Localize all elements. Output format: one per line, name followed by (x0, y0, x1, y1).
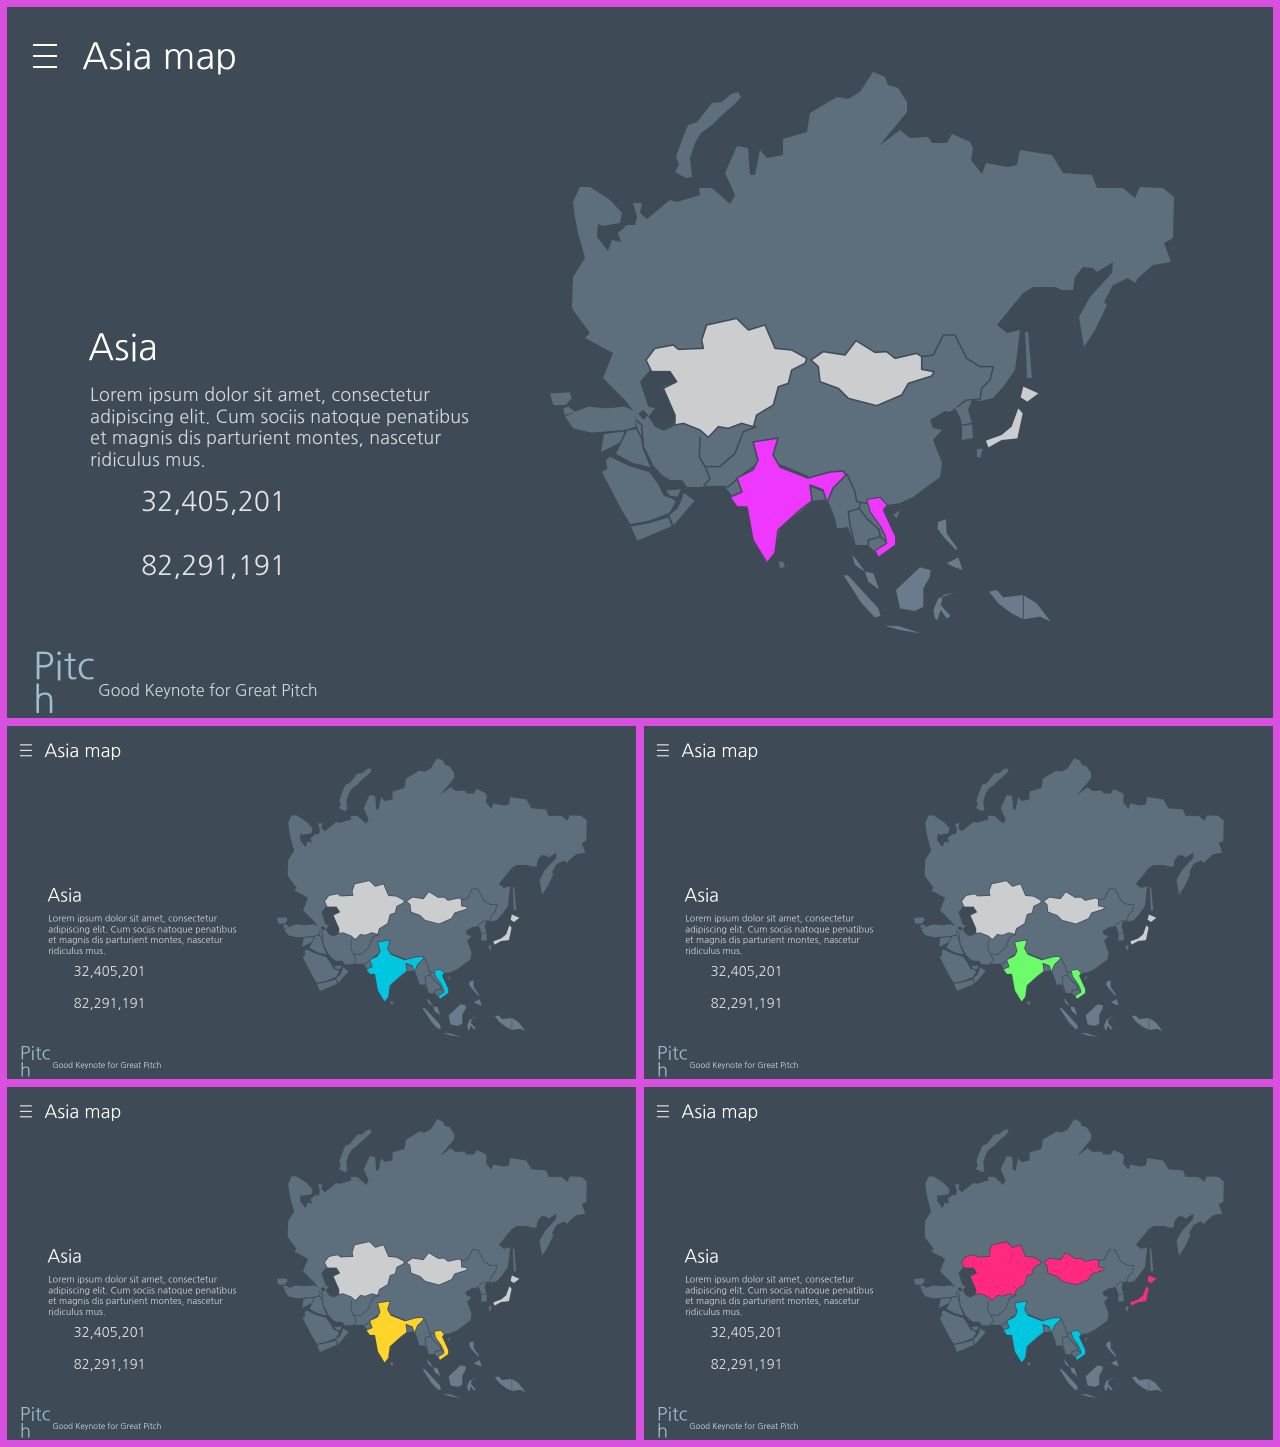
text block: adipiscing elit. Cum sociis natoque penatibus (685, 1286, 873, 1295)
tagline: Good Keynote for Great Pitch (98, 683, 318, 699)
text block: adipiscing elit. Cum sociis natoque penatibus (90, 408, 469, 426)
logo: Pitch (657, 1044, 688, 1079)
text block: et magnis dis parturient montes, nascetur (685, 936, 860, 944)
base land masses (550, 72, 1174, 633)
number two: 82,291,191 (711, 1358, 783, 1371)
text block: adipiscing elit. Cum sociis natoque penatibus (685, 925, 873, 934)
Asia map graphic (550, 72, 1174, 634)
logo: Pitch (20, 1044, 51, 1079)
base land masses (914, 758, 1224, 1037)
text block (48, 1275, 236, 1316)
highlighted Vietnam (434, 969, 448, 999)
tagline: Good Keynote for Great Pitch (52, 1062, 161, 1070)
Japan (493, 1276, 519, 1306)
Asia map graphic (276, 758, 587, 1037)
heading: Asia (684, 1247, 719, 1265)
text block: ridiculus mus. (48, 946, 106, 955)
title: Asia map (44, 1103, 121, 1121)
text block: ridiculus mus. (685, 1307, 743, 1316)
text block: et magnis dis parturient montes, nascetur (685, 1297, 860, 1305)
text block: ridiculus mus. (90, 450, 206, 468)
heading: Asia (47, 886, 82, 904)
title: Asia map (44, 742, 121, 760)
text block: Lorem ipsum dolor sit amet, consectetur (48, 914, 217, 923)
logo: Pitch (33, 648, 95, 718)
title: Asia map (681, 1103, 758, 1121)
Kazakhstan (961, 1242, 1041, 1301)
Mongolia (406, 1253, 468, 1285)
highlighted India (730, 438, 846, 563)
text block: adipiscing elit. Cum sociis natoque penatibus (48, 1286, 236, 1295)
tagline: Good Keynote for Great Pitch (52, 1423, 161, 1431)
text block: ridiculus mus. (685, 946, 743, 955)
text block (48, 914, 236, 955)
panel: mini slide, cyan highlight (7, 726, 636, 1079)
highlighted Vietnam (434, 1330, 448, 1360)
Mongolia (1043, 892, 1105, 924)
highlighted Vietnam (1071, 1330, 1085, 1360)
icon: menu (20, 744, 32, 756)
Asia map graphic (914, 1119, 1224, 1398)
Japan (1130, 1276, 1156, 1306)
Kazakhstan (961, 881, 1041, 940)
number one: 32,405,201 (711, 965, 783, 978)
Japan (1130, 915, 1156, 945)
text block: et magnis dis parturient montes, nascetur (48, 1297, 223, 1305)
highlighted India (1003, 940, 1061, 1002)
panel: mini slide, green highlight (644, 726, 1273, 1079)
text block (685, 914, 874, 955)
icon: menu (20, 1105, 32, 1118)
Mongolia (406, 892, 468, 924)
text block: Lorem ipsum dolor sit amet, consectetur (685, 1275, 854, 1284)
heading: Asia (88, 330, 158, 366)
text block: Lorem ipsum dolor sit amet, consectetur (48, 1275, 217, 1284)
Asia map graphic (276, 1119, 587, 1398)
highlighted India (1003, 1301, 1061, 1363)
text block: Lorem ipsum dolor sit amet, consectetur (685, 914, 854, 923)
icon: menu (33, 44, 57, 68)
text block (685, 1275, 874, 1316)
title: Asia map (82, 39, 237, 75)
heading: Asia (684, 886, 719, 904)
panel: mini slide, yellow highlight (7, 1087, 636, 1440)
Kazakhstan (324, 1242, 404, 1301)
text block: adipiscing elit. Cum sociis natoque penatibus (48, 925, 236, 934)
Kazakhstan (324, 881, 404, 940)
highlighted India (366, 940, 424, 1002)
Asia map graphic (914, 758, 1224, 1037)
highlighted Vietnam (867, 497, 896, 557)
panel: main slide, magenta highlight (7, 7, 1273, 718)
base land masses (277, 758, 587, 1037)
logo: Pitch (657, 1405, 688, 1440)
number two: 82,291,191 (711, 997, 783, 1010)
Mongolia (811, 341, 934, 406)
Mongolia (1043, 1253, 1105, 1285)
icon: menu (656, 1105, 669, 1118)
Japan (986, 387, 1038, 447)
highlighted Vietnam (1071, 969, 1085, 999)
panel: mini slide, pink and cyan highlight (644, 1087, 1273, 1440)
text block: et magnis dis parturient montes, nascetur (90, 429, 441, 447)
base land masses (277, 1119, 587, 1398)
Japan (493, 915, 519, 945)
tagline: Good Keynote for Great Pitch (689, 1062, 798, 1070)
tagline: Good Keynote for Great Pitch (689, 1423, 798, 1431)
logo: Pitch (20, 1405, 51, 1440)
number two: 82,291,191 (74, 997, 146, 1010)
base land masses (914, 1119, 1224, 1398)
text block: ridiculus mus. (48, 1307, 106, 1316)
number one: 32,405,201 (74, 965, 146, 978)
number two: 82,291,191 (74, 1358, 146, 1371)
Kazakhstan (646, 318, 807, 437)
text block: Lorem ipsum dolor sit amet, consectetur (90, 386, 430, 404)
icon: menu (656, 744, 669, 756)
number one: 32,405,201 (711, 1326, 783, 1339)
highlighted India (366, 1301, 424, 1363)
title: Asia map (681, 742, 758, 760)
text block (90, 386, 469, 468)
number one: 32,405,201 (141, 488, 286, 515)
heading: Asia (47, 1247, 82, 1265)
text block: et magnis dis parturient montes, nascetur (48, 936, 223, 944)
number one: 32,405,201 (74, 1326, 146, 1339)
number two: 82,291,191 (141, 552, 286, 579)
